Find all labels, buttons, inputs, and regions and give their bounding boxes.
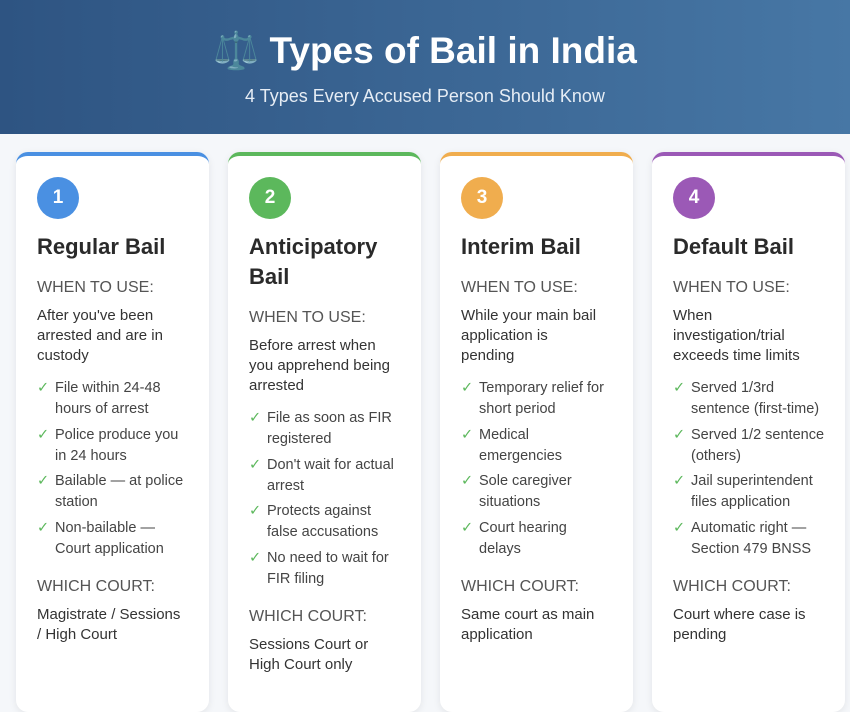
badge 2	[249, 177, 291, 219]
list: arrest	[267, 478, 304, 494]
header	[0, 0, 850, 134]
list: Sole caregiver	[479, 473, 572, 489]
panel: anticipatory bail	[228, 152, 421, 712]
list: registered	[267, 431, 331, 447]
heading: Bail	[249, 264, 289, 289]
label: WHICH COURT:	[37, 578, 155, 594]
panel: regular bail	[16, 152, 209, 712]
text: High Court only	[249, 656, 352, 672]
label: WHEN TO USE:	[673, 279, 790, 296]
list: Protects against	[267, 503, 371, 519]
label: WHICH COURT:	[461, 578, 579, 594]
text: pending	[673, 626, 726, 642]
list: File as soon as FIR	[267, 410, 392, 426]
list: Jail superintendent	[691, 473, 813, 489]
list: Section 479 BNSS	[691, 540, 811, 556]
text: application is	[461, 327, 548, 344]
heading	[249, 234, 378, 289]
text: While your main bail	[461, 307, 596, 324]
list: Bailable — at police	[55, 473, 183, 489]
text: custody	[37, 347, 89, 364]
text: application	[461, 626, 533, 642]
list	[39, 380, 183, 556]
list: (others)	[691, 448, 741, 464]
heading: Anticipatory	[249, 234, 377, 259]
list: Non-bailable —	[55, 520, 155, 536]
list: Automatic right —	[691, 520, 806, 536]
heading: Regular Bail	[37, 234, 165, 259]
badge 3	[461, 177, 503, 219]
heading: Interim Bail	[461, 234, 581, 259]
text: investigation/trial	[673, 327, 785, 344]
list: short period	[479, 401, 556, 417]
text	[249, 337, 390, 394]
list: Temporary relief for	[479, 380, 604, 396]
text: Magistrate / Sessions	[37, 606, 180, 622]
label: WHEN TO USE:	[461, 279, 578, 296]
label: WHICH COURT:	[249, 608, 367, 624]
list: station	[55, 494, 98, 510]
title: ⚖️ Types of Bail in India	[213, 30, 637, 71]
subtitle: 4 Types Every Accused Person Should Know	[245, 86, 605, 106]
text	[37, 606, 180, 642]
text: When	[673, 307, 712, 324]
list: delays	[479, 540, 521, 556]
list: Served 1/2 sentence	[691, 426, 824, 442]
text: Before arrest when	[249, 337, 376, 354]
list: Court hearing	[479, 520, 567, 536]
list: in 24 hours	[55, 448, 127, 464]
list: Served 1/3rd	[691, 380, 774, 396]
label: WHICH COURT:	[673, 578, 791, 594]
list: Police produce you	[55, 426, 178, 442]
text	[673, 307, 800, 364]
list	[251, 410, 394, 586]
badge 4: 4	[689, 187, 699, 208]
label: WHEN TO USE:	[249, 309, 366, 326]
text: arrested and are in	[37, 327, 163, 344]
badge 1	[37, 177, 79, 219]
badge 4	[673, 177, 715, 219]
text	[37, 307, 163, 364]
text: / High Court	[37, 626, 117, 642]
text	[461, 606, 594, 642]
badge 3: 3	[477, 187, 487, 208]
panel: interim bail	[440, 152, 633, 712]
list: FIR filing	[267, 570, 324, 586]
list: sentence (first-time)	[691, 401, 819, 417]
text: arrested	[249, 377, 304, 394]
panel: default bail	[652, 152, 845, 712]
text	[673, 606, 806, 642]
badge 1: 1	[53, 187, 63, 208]
text	[461, 307, 596, 364]
list: emergencies	[479, 448, 562, 464]
label: WHEN TO USE:	[37, 279, 154, 296]
text: After you've been	[37, 307, 153, 324]
text: Court where case is	[673, 606, 806, 622]
text: pending	[461, 347, 514, 364]
list: Court application	[55, 540, 164, 556]
text: Same court as main	[461, 606, 594, 622]
list: File within 24-48	[55, 380, 161, 396]
text: exceeds time limits	[673, 347, 800, 364]
badge 2: 2	[265, 187, 275, 208]
heading: Default Bail	[673, 234, 794, 259]
text	[249, 636, 368, 672]
list: files application	[691, 494, 790, 510]
list: hours of arrest	[55, 401, 148, 417]
list: No need to wait for	[267, 550, 389, 566]
list: false accusations	[267, 524, 378, 540]
list	[463, 380, 604, 556]
text: you apprehend being	[249, 357, 390, 374]
text: Sessions Court or	[249, 636, 368, 652]
list: Don't wait for actual	[267, 456, 394, 472]
list	[675, 380, 824, 556]
list: situations	[479, 494, 540, 510]
list: Medical	[479, 426, 529, 442]
